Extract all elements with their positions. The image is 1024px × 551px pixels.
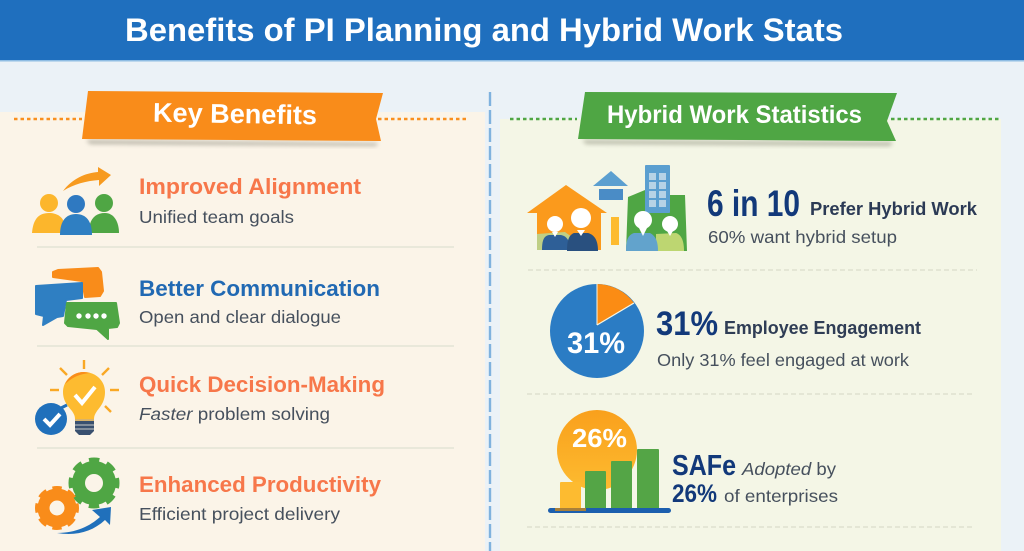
text: prefer hybrid work: 60% want hybrid setup [708,227,897,247]
benefit: better communication [36,268,380,339]
text: safe adoption: 26% [672,480,717,508]
icon: badge and bar chart: 26% [572,423,627,453]
text: enhanced productivity: Enhanced Productivity [139,472,382,497]
icon: gears with arrow [38,460,116,534]
benefit: enhanced productivity [38,460,382,534]
stat: safe adoption [548,410,838,513]
text: improved alignment: Improved Alignment [139,174,362,199]
text: safe adoption: Adopted by [741,459,836,479]
text: employee engagement [656,305,921,370]
chart: engagement pie [550,284,644,378]
stat: prefer hybrid work [527,165,978,251]
icon: badge and bar chart [548,410,671,513]
chart: engagement pie: 31% [567,327,625,360]
text: employee engagement: 31% [656,305,718,343]
title: Benefits of PI Planning and Hybrid Work Stats [125,12,843,48]
text: employee engagement: Employee Engagement [724,317,921,338]
panel: hybrid work statistics [500,92,1001,551]
panel: key benefits [0,91,485,551]
icon: home and office workers [527,165,687,251]
text: quick decision-making [139,372,385,424]
text: safe adoption: SAFe [672,450,736,482]
benefit: improved alignment [32,167,362,235]
centre dashed divider [489,92,491,551]
text: employee engagement: Only 31% feel engaged at work [657,350,909,370]
text: prefer hybrid work: Prefer Hybrid Work [810,198,978,219]
text: safe adoption [672,450,838,508]
text: prefer hybrid work: 6 in 10 [707,183,800,224]
text: better communication: Open and clear dialogue [139,307,341,327]
icon: team with arrow [32,167,119,235]
heading ribbon: hybrid work statistics: Hybrid Work Statistics [607,101,862,129]
stat: employee engagement [550,284,921,378]
text: enhanced productivity: Efficient project delivery [139,504,340,524]
icon: speech bubbles [36,268,119,339]
icon: light bulb with check [35,360,119,435]
benefit: quick decision-making [35,360,385,435]
heading ribbon: key benefits: Key Benefits [153,98,317,130]
text: prefer hybrid work [707,183,978,247]
text: quick decision-making: Faster problem solving [139,404,330,424]
text: better communication [139,276,380,327]
text: better communication: Better Communication [139,276,380,301]
header banner [0,0,1024,62]
text: enhanced productivity [139,472,382,524]
text: safe adoption: of enterprises [724,486,838,506]
text: improved alignment [139,174,362,227]
text: quick decision-making: Quick Decision-Making [139,372,385,397]
text: improved alignment: Unified team goals [139,207,294,227]
heading ribbon: key benefits [82,91,383,141]
heading ribbon: hybrid work statistics [578,92,897,141]
